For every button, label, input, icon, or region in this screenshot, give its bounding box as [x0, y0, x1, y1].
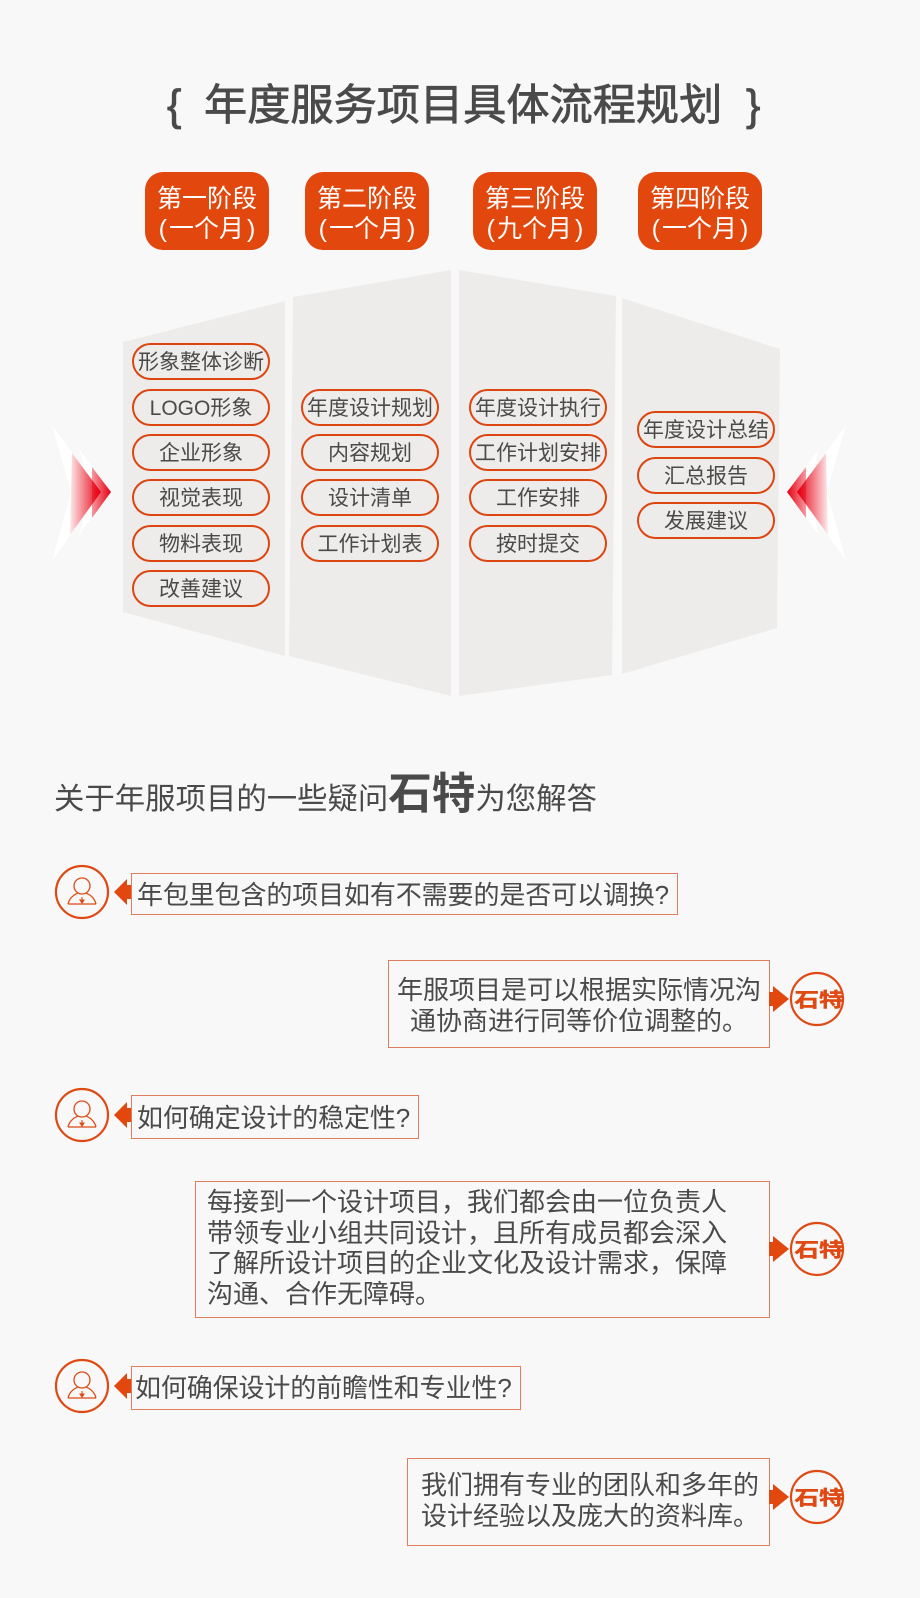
title: }	[746, 82, 760, 130]
pill item	[301, 525, 439, 562]
question 3 box: 如何确保设计的前瞻性和专业性?	[135, 1373, 512, 1403]
answer 1 box: 年服项目是可以根据实际情况沟	[397, 975, 761, 1005]
stage button: phase 2: 第二阶段	[317, 185, 417, 213]
pill item	[469, 479, 607, 516]
answer 3 box	[407, 1458, 770, 1546]
stage button: phase 2	[305, 172, 429, 250]
pill item	[469, 434, 607, 471]
answer 2 icon: 石特 logo with arrow	[769, 1222, 844, 1276]
pill item: 物料表现	[159, 533, 243, 556]
answer 2 box: 沟通、合作无障碍。	[207, 1278, 441, 1308]
pill item: 工作安排	[496, 487, 580, 510]
answer 1 box	[388, 960, 770, 1048]
pill item	[132, 343, 270, 380]
pill item: 视觉表现	[159, 487, 243, 510]
question 1 icon: person with arrow	[54, 864, 131, 920]
pill item: 汇总报告	[664, 465, 748, 488]
answer 2 box: 每接到一个设计项目，我们都会由一位负责人	[207, 1187, 727, 1217]
pill item: LOGO形象	[150, 397, 252, 420]
answer 1 box: 通协商进行同等价位调整的。	[410, 1006, 748, 1036]
section heading: 关于年服项目的一些疑问石特为您解答	[54, 771, 597, 819]
pill item	[301, 434, 439, 471]
pill item: 形象整体诊断	[138, 351, 264, 374]
question 2 box	[131, 1095, 419, 1139]
stage button: phase 3: (九个月)	[487, 215, 583, 243]
stage button: phase 4: (一个月)	[652, 215, 748, 243]
stage button: phase 1: (一个月)	[159, 215, 255, 243]
pill item: 内容规划	[328, 442, 412, 465]
answer 2 box: 带领专业小组共同设计，且所有成员都会深入	[207, 1218, 727, 1248]
pill item	[301, 479, 439, 516]
question 1 box: 年包里包含的项目如有不需要的是否可以调换?	[137, 880, 669, 910]
pill item	[132, 389, 270, 426]
pill item: 改善建议	[159, 578, 243, 601]
pill item: 发展建议	[664, 510, 748, 533]
pill item	[637, 502, 775, 539]
answer 3 icon: 石特 logo with arrow	[769, 1470, 844, 1524]
pill item	[132, 570, 270, 607]
panel: phase 2 background	[289, 270, 451, 696]
answer 3 icon: 石特 logo with arrow: 石特	[794, 1487, 844, 1509]
column 2 items	[301, 389, 439, 562]
title: 年度服务项目具体流程规划	[204, 82, 722, 130]
stage button: phase 3: 第三阶段	[485, 185, 585, 213]
pill item	[469, 389, 607, 426]
title: {	[167, 82, 181, 130]
pill item: 设计清单	[328, 487, 412, 510]
pill item: 按时提交	[496, 533, 580, 556]
column 1 items	[132, 343, 270, 607]
stage button: phase 3	[473, 172, 597, 250]
panel: phase 3 background	[459, 270, 616, 696]
stage button: phase 4: 第四阶段	[650, 185, 750, 213]
answer 2 box	[195, 1181, 770, 1318]
column 3 items	[469, 389, 607, 562]
arrow: right red chevrons	[787, 425, 846, 561]
answer 1 icon: 石特 logo with arrow	[769, 972, 844, 1026]
pill item	[132, 434, 270, 471]
pill item: 年度设计执行	[475, 397, 601, 420]
pill item: 年度设计规划	[307, 397, 433, 420]
pill item: 企业形象	[159, 442, 243, 465]
question 1 box	[131, 873, 678, 915]
question 2 box: 如何确定设计的稳定性?	[137, 1103, 410, 1133]
stage button: phase 4	[638, 172, 762, 250]
stage button: phase 1	[145, 172, 269, 250]
pill item: 年度设计总结	[643, 419, 769, 442]
answer 2 icon: 石特 logo with arrow: 石特	[794, 1239, 844, 1261]
question 3 icon: person with arrow	[54, 1358, 131, 1414]
arrow: left red chevrons	[52, 425, 111, 561]
pill item: 工作计划表	[318, 533, 422, 556]
pill item	[469, 525, 607, 562]
pill item	[637, 411, 775, 448]
answer 3 box: 我们拥有专业的团队和多年的	[421, 1470, 759, 1500]
pill item: 工作计划安排	[475, 442, 601, 465]
answer 2 box: 了解所设计项目的企业文化及设计需求，保障	[207, 1248, 727, 1278]
perspective panels background	[70, 270, 828, 696]
stage button: phase 2: (一个月)	[319, 215, 415, 243]
answer 3 box: 设计经验以及庞大的资料库。	[421, 1500, 759, 1530]
column 4 items	[637, 411, 775, 539]
question 3 box	[131, 1366, 521, 1410]
answer 1 icon: 石特 logo with arrow: 石特	[794, 989, 844, 1011]
panel: phase 4 background	[622, 298, 780, 674]
question 2 icon: person with arrow	[54, 1088, 131, 1142]
pill item	[132, 525, 270, 562]
panel: phase 1 background	[123, 301, 285, 656]
pill item	[301, 389, 439, 426]
pill item	[637, 457, 775, 494]
stage button: phase 1: 第一阶段	[157, 185, 257, 213]
pill item	[132, 479, 270, 516]
